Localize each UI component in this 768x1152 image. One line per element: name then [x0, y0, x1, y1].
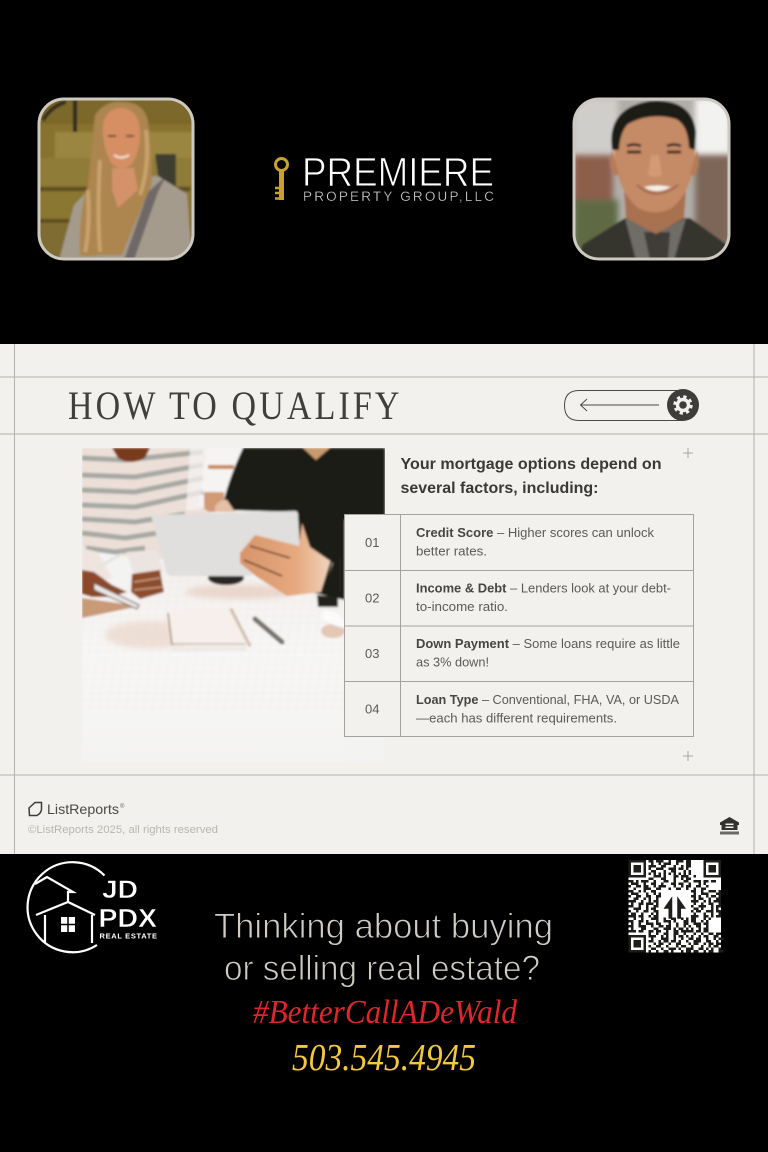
row 03	[365, 637, 680, 670]
pen	[255, 619, 282, 642]
row 02: Income & Debt – Lenders look at your debt-	[416, 582, 671, 596]
row 04: 04	[365, 702, 379, 716]
dark shirt	[222, 448, 385, 608]
window background	[200, 448, 250, 528]
logo: Premiere Property Group: PROPERTY GROUP,LLC	[303, 189, 494, 204]
QR code	[628, 860, 724, 952]
heading: HOW TO QUALIFY	[68, 385, 400, 429]
chest	[100, 178, 148, 236]
hair	[80, 102, 152, 256]
row 01	[365, 526, 655, 558]
panel: how to qualify	[0, 344, 768, 854]
logo: JD PDX real estate: PDX	[98, 903, 158, 933]
striped shirt	[82, 448, 208, 560]
hair	[611, 101, 696, 150]
left hands	[82, 548, 112, 582]
dark object under tablet	[208, 571, 244, 585]
row 01: better rates.	[416, 544, 487, 558]
subheading: Your mortgage options depend on	[400, 456, 662, 473]
subheading: several factors, including:	[400, 480, 598, 497]
copyright: ©ListReports 2025, all rights reserved	[28, 824, 218, 836]
logo: ListReports: ListReports	[47, 801, 119, 817]
tablet	[151, 511, 300, 576]
portrait: man	[573, 98, 731, 260]
logo: JD PDX real estate	[28, 862, 158, 952]
logo: JD PDX real estate: JD	[102, 876, 138, 904]
notebook	[170, 623, 242, 644]
row 04: —each has different requirements.	[416, 712, 617, 726]
cardigan	[59, 176, 192, 260]
subheading	[400, 456, 662, 497]
row 03: 03	[365, 646, 379, 661]
call to action: or selling real estate?	[224, 949, 540, 988]
phone in hand	[94, 583, 139, 609]
right hand	[240, 523, 333, 596]
row 02	[365, 582, 671, 614]
row 01: Credit Score – Higher scores can unlock	[416, 526, 655, 540]
hashtag: #BetterCallADeWald	[253, 994, 518, 1031]
row 02: to-income ratio.	[416, 600, 508, 614]
row 02: 02	[365, 590, 379, 606]
row 04: Loan Type – Conventional, FHA, VA, or USDA	[416, 693, 680, 707]
logo: JD PDX real estate: REAL ESTATE	[100, 932, 157, 940]
icon: house in circle	[28, 862, 104, 952]
face	[103, 108, 140, 168]
logo: Premiere Property Group: PREMIERE	[302, 149, 494, 195]
row 04	[365, 693, 680, 726]
row 01: 01	[365, 535, 379, 550]
row 03: as 3% down!	[416, 656, 489, 670]
plus marks	[683, 448, 693, 761]
face	[614, 108, 695, 212]
call to action: Thinking about buying	[214, 907, 553, 946]
pill with arrow and gear	[564, 389, 699, 421]
table	[310, 592, 344, 610]
call to action	[214, 907, 553, 1079]
jacket	[578, 218, 730, 260]
icon: gold key	[275, 158, 288, 200]
logo: ListReports: ®	[120, 803, 125, 810]
table: qualifying factors	[344, 514, 694, 736]
icon: equal housing	[720, 817, 739, 834]
row 03: Down Payment – Some loans require as little	[416, 637, 680, 651]
neck	[624, 190, 686, 234]
logo: Premiere Property Group	[275, 149, 494, 204]
portrait: woman	[38, 98, 194, 260]
photo: people with tablet at table	[82, 448, 385, 670]
phone number: 503.545.4945	[292, 1037, 476, 1079]
